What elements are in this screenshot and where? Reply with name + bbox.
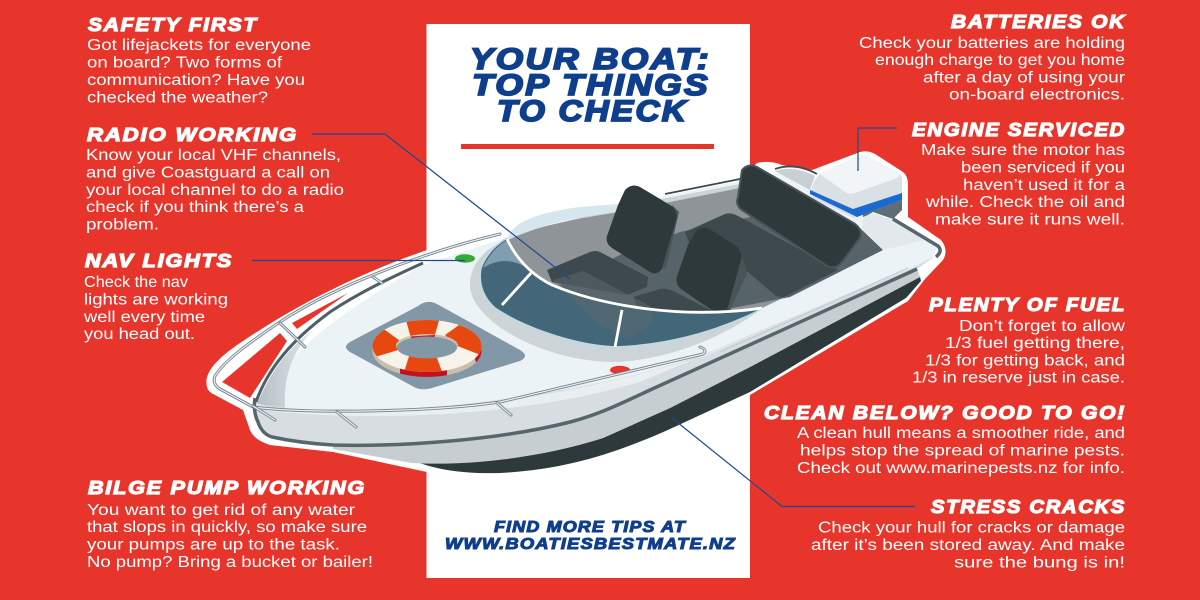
text: batteries ok: after a day of using your [923,70,1125,86]
rear bench seat cushion [685,213,838,297]
text: engine serviced [921,142,1125,228]
heading: clean below: CLEAN BELOW? GOOD TO GO! [764,403,1126,423]
radio working [86,125,344,234]
text: plenty of fuel: 1/3 fuel getting there, [945,335,1125,352]
bow rail gaps [222,293,348,398]
title: TO CHECK [497,95,688,128]
text: bilge pump working: No pump? Bring a bucket or bailer! [87,554,373,571]
hull side [255,250,934,446]
engine fairing [775,169,815,190]
lower deck band [262,258,930,416]
text: stress cracks [811,520,1125,572]
engine serviced [912,120,1126,228]
text: stress cracks: Check your hull for cracks or damage [818,520,1125,536]
upper windscreen [508,204,618,240]
rear dark rim [893,219,940,257]
text: safety first: communication? Have you [87,72,305,89]
text: safety first: Got lifejackets for everyone [87,37,311,54]
heading: bilge pump working: BILGE PUMP WORKING [88,478,366,498]
title: YOUR BOAT: [470,43,711,76]
bow deck shadow [257,330,313,408]
bow rail [214,234,705,427]
title: TOP THINGS [472,69,710,102]
text: bilge pump working [87,502,373,571]
centre cushion [633,289,718,317]
windscreen glass [480,238,762,347]
text: plenty of fuel [912,318,1126,386]
cockpit floor [560,215,883,318]
windscreen frame [502,239,762,347]
heading: engine serviced: ENGINE SERVICED [912,120,1126,140]
white centre panel [426,24,750,578]
footer call to action: WWW.BOATIESBESTMATE.NZ [445,536,736,553]
text: nav lights: Check the nav [84,274,188,291]
cockpit surround [470,183,790,362]
text: nav lights [83,274,228,343]
clean below [764,403,1126,477]
text: radio working: and give Coastguard a call on [86,164,330,182]
nav lights [83,251,233,343]
outboard motor [810,154,902,219]
batteries ok [859,12,1127,104]
text: clean below: Check out www.marinepests.nz for info. [797,460,1125,477]
leader lines [252,128,915,506]
rear deck corner [862,213,925,250]
text: engine serviced: haven’t used it for a [963,177,1125,194]
text: radio working: check if you think there’s a [86,199,304,216]
deck [262,172,938,413]
front left cushion [547,251,648,295]
text: batteries ok: Check your batteries are holding [859,35,1125,52]
windscreen cushion reflection [553,271,654,338]
lifebuoy [372,320,482,377]
windscreen left lighter band [483,240,527,268]
text: batteries ok: enough charge to get you home [875,52,1125,69]
text: radio working [86,147,344,234]
text: plenty of fuel: 1/3 in reserve just in case. [912,370,1125,386]
red navigation light [610,366,630,374]
heading: stress cracks: STRESS CRACKS [931,497,1126,517]
lifebuoy mount plate [346,302,525,389]
text: batteries ok [859,35,1125,104]
text: safety first: on board? Two forms of [87,54,283,72]
text: plenty of fuel: Don’t forget to allow [959,318,1126,335]
text: clean below: helps stop the spread of marine pests. [800,442,1125,460]
text: safety first [87,37,311,106]
text: stress cracks: sure the bung is in! [954,554,1125,572]
text: stress cracks: after it’s been stored away. And make [811,537,1125,554]
grey hull band [333,268,920,464]
heading: safety first: SAFETY FIRST [88,15,259,35]
title rule [461,144,714,149]
top coaming line [665,166,817,194]
front left backrest [607,186,679,274]
deck side line [720,268,908,352]
text: clean below: A clean hull means a smoother ride, and [797,425,1125,442]
text: radio working: Know your local VHF channels, [86,147,341,164]
footer call to action: FIND MORE TIPS AT [494,519,687,536]
cockpit interior [506,187,883,316]
text: engine serviced: while. Check the oil and [925,194,1125,211]
title [470,43,711,128]
text: nav lights: you head out. [84,326,195,343]
boat white halo outline [206,151,946,478]
front right backrest [676,228,747,315]
heading: nav lights: NAV LIGHTS [85,251,233,271]
hull stripe [254,269,917,445]
safety first [87,15,311,106]
heading: batteries ok: BATTERIES OK [951,12,1127,32]
text: plenty of fuel: 1/3 for getting back, and [925,352,1125,370]
text: engine serviced: Make sure the motor has [921,142,1125,159]
text: nav lights: well every time [83,309,205,326]
text: bilge pump working: your pumps are up to the task. [87,536,340,554]
plenty of fuel [912,295,1126,386]
green navigation light [455,254,475,263]
text: batteries ok: on-board electronics. [949,86,1125,104]
boat illustration [206,151,946,478]
text: clean below [797,425,1125,477]
bilge pump working [87,478,373,571]
heading: radio working: RADIO WORKING [87,125,298,145]
text: radio working: problem. [86,216,159,234]
bow dark gunwale line [256,263,423,402]
text: safety first: checked the weather? [87,90,268,106]
text: bilge pump working: that slops in quickly, so make sure [87,519,367,536]
rear bench backrest [737,166,861,267]
heading: plenty of fuel: PLENTY OF FUEL [929,295,1126,315]
text: engine serviced: make sure it runs well. [935,212,1125,228]
footer call to action [445,519,736,553]
text: bilge pump working: You want to get rid of any water [87,502,355,519]
dark lower hull [412,277,921,473]
text: engine serviced: been serviced if you [961,160,1125,176]
text: radio working: your local channel to do a radio [86,182,344,199]
stress cracks [811,497,1126,572]
text: nav lights: lights are working [84,292,228,308]
